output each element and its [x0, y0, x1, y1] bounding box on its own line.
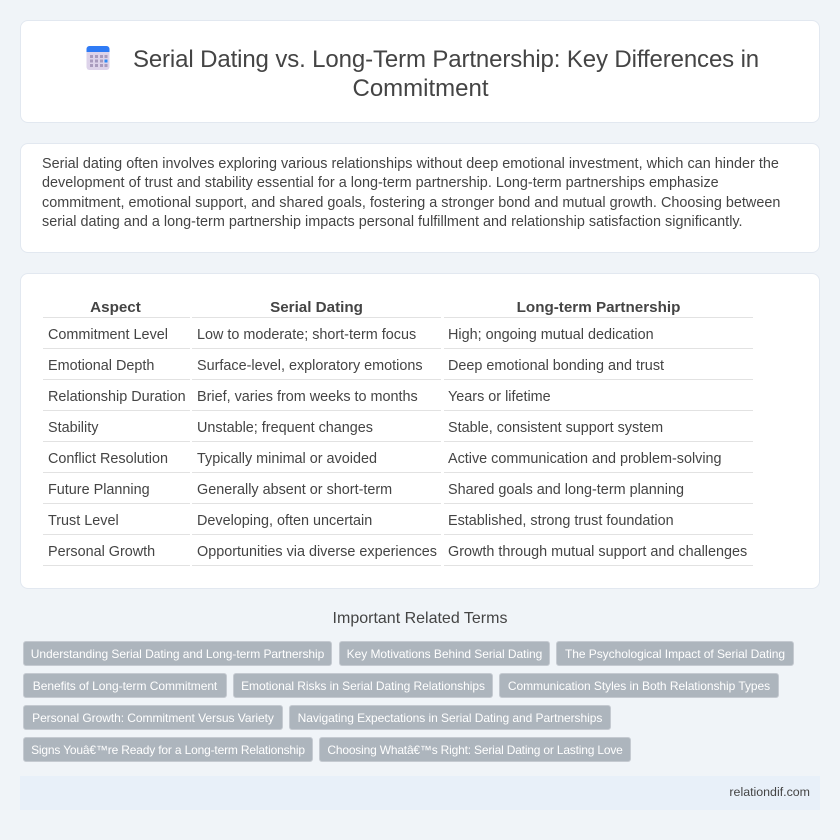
tag: [23, 673, 227, 698]
header: serial dating: Serial Dating: [270, 299, 363, 316]
tag: Benefits of Long-term Commitment: [33, 679, 217, 693]
row: future planning: Future Planning: [48, 482, 150, 498]
footer bar: [20, 776, 820, 810]
comparison table: High; ongoing mutual dedication: [448, 327, 654, 343]
tag: Personal Growth: Commitment Versus Variety: [32, 711, 274, 725]
intro text: Serial dating often involves exploring various relationships without deep emotional investment, which can hinder the: [42, 156, 779, 172]
comparison table: Active communication and problem-solving: [448, 451, 722, 467]
intro text: [42, 156, 780, 230]
comparison table: Developing, often uncertain: [197, 513, 372, 529]
tag: [289, 705, 611, 730]
row: conflict resolution: Conflict Resolution: [48, 451, 168, 467]
intro text: serial dating and a long-term partnership impacts personal fulfillment and relationship satisfaction significantly.: [42, 214, 743, 230]
tag: The Psychological Impact of Serial Dating: [565, 647, 785, 661]
comparison table: Low to moderate; short-term focus: [197, 327, 416, 343]
header card: [20, 20, 820, 123]
row: trust level: Trust Level: [48, 513, 119, 529]
row: commitment level: Commitment Level: [48, 327, 168, 343]
title: Serial Dating vs. Long-Term Partnership: Key Differences in: [133, 46, 759, 73]
comparison table: Years or lifetime: [448, 389, 551, 405]
comparison table: Stable, consistent support system: [448, 420, 663, 436]
tag: [556, 641, 794, 666]
comparison table: Unstable; frequent changes: [197, 420, 373, 436]
comparison table: Shared goals and long-term planning: [448, 482, 684, 498]
comparison table: Brief, varies from weeks to months: [197, 389, 418, 405]
tag: [339, 641, 550, 666]
related term tags: [23, 641, 794, 762]
tag: Emotional Risks in Serial Dating Relationships: [241, 679, 485, 693]
footer source: relationdif.com: [729, 785, 810, 799]
tag: [23, 737, 313, 762]
comparison table: Deep emotional bonding and trust: [448, 358, 664, 374]
tag: Understanding Serial Dating and Long-term Partnership: [31, 647, 324, 661]
table card: [20, 273, 820, 589]
row: emotional depth: Emotional Depth: [48, 358, 154, 374]
tag: [319, 737, 631, 762]
tag: Signs Youâ€™re Ready for a Long-term Relationship: [31, 743, 305, 757]
tag: [23, 641, 332, 666]
header: aspect: Aspect: [90, 299, 141, 316]
icon: calendar: [86, 46, 110, 70]
comparison table: Surface-level, exploratory emotions: [197, 358, 423, 374]
row: personal growth: Personal Growth: [48, 544, 155, 560]
intro card: [20, 143, 820, 253]
comparison table: Growth through mutual support and challenges: [448, 544, 747, 560]
related terms heading: Important Related Terms: [333, 610, 507, 627]
tag: Communication Styles in Both Relationship Types: [508, 679, 770, 693]
comparison table: Generally absent or short-term: [197, 482, 392, 498]
intro text: development of trust and stability essential for a long-term partnership. Long-term partnerships emphasize: [42, 175, 719, 191]
header: long-term partnership: Long-term Partnership: [517, 299, 680, 316]
title: Commitment: [352, 75, 489, 102]
comparison table: Typically minimal or avoided: [197, 451, 377, 467]
comparison table: Established, strong trust foundation: [448, 513, 674, 529]
row: relationship duration: Relationship Duration: [48, 389, 186, 405]
tag: Key Motivations Behind Serial Dating: [347, 647, 542, 661]
comparison table: Opportunities via diverse experiences: [197, 544, 437, 560]
tag: [499, 673, 779, 698]
tag: Navigating Expectations in Serial Dating and Partnerships: [298, 711, 602, 725]
intro text: commitment, emotional support, and shared goals, fostering a stronger bond and mutual growth. Choosing between: [42, 195, 780, 211]
tag: [23, 705, 283, 730]
tag: Choosing Whatâ€™s Right: Serial Dating or Lasting Love: [327, 743, 623, 757]
title: [133, 46, 759, 102]
tag: [233, 673, 493, 698]
row: stability: Stability: [48, 420, 98, 436]
